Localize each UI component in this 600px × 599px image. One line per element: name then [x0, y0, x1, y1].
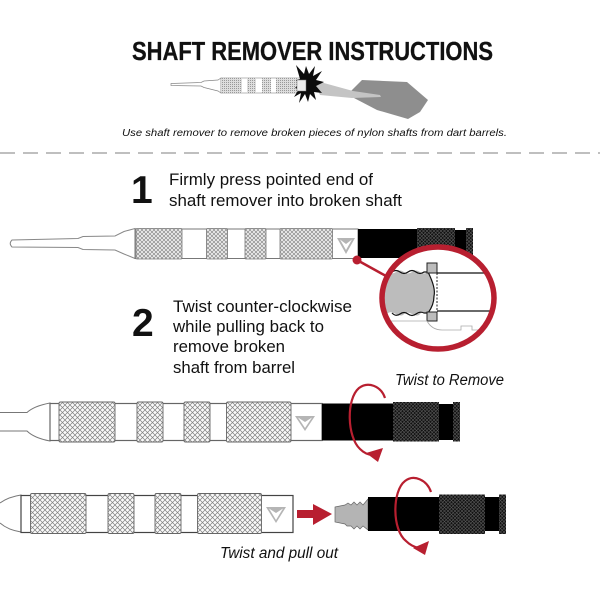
thread lines	[392, 270, 434, 316]
end knurl	[499, 494, 506, 534]
dark knurl	[393, 402, 439, 442]
dart 2	[0, 385, 460, 462]
dart barrel	[221, 78, 305, 93]
step 1 text: Firmly press pointed end of	[169, 170, 373, 189]
dart 1	[10, 228, 473, 260]
outline of shaft	[391, 320, 478, 330]
title: SHAFT REMOVER INSTRUCTIONS	[132, 36, 493, 66]
barrel	[50, 404, 322, 440]
bore lines	[437, 273, 490, 311]
step 2 text: while pulling back to	[172, 317, 324, 336]
dart shaft	[313, 80, 381, 98]
step 1 number: 1	[131, 169, 153, 212]
black section	[455, 230, 467, 258]
magnified detail callout	[352, 247, 494, 349]
subtitle: Use shaft remover to remove broken pieces of nylon shafts from dart barrels.	[122, 128, 507, 139]
logo	[337, 238, 355, 254]
step 2 number: 2	[132, 302, 154, 345]
knurled grips	[136, 228, 332, 259]
end knurl	[466, 228, 473, 260]
barrel flange	[427, 263, 437, 321]
twist to remove label: Twist to Remove	[395, 372, 504, 389]
removed shaft assembly	[335, 478, 506, 555]
threaded broken piece	[335, 499, 368, 530]
lens content	[378, 263, 490, 330]
dark knurl	[439, 494, 485, 534]
dart tip	[171, 78, 221, 93]
step 2 text: shaft from barrel	[173, 358, 295, 377]
twist arrow	[395, 478, 431, 555]
tip	[0, 495, 21, 532]
tip	[0, 403, 50, 441]
logo	[295, 416, 315, 431]
leader line	[357, 260, 386, 276]
impact star	[294, 65, 324, 103]
barrel	[135, 229, 358, 258]
leader dot	[352, 256, 362, 264]
step 2 text: Twist counter-clockwise	[173, 297, 352, 316]
barrel	[21, 496, 293, 532]
logo	[266, 507, 286, 523]
twist and pull out label: Twist and pull out	[220, 545, 339, 562]
lens background	[382, 247, 494, 349]
step 1 text: shaft remover into broken shaft	[169, 191, 402, 210]
lens ring	[382, 247, 494, 349]
dashed divider	[0, 152, 600, 154]
black shaft section	[322, 404, 393, 440]
black shaft section	[368, 497, 439, 531]
twist arrow	[350, 385, 385, 462]
knurled grips	[59, 402, 291, 442]
dart flight	[350, 80, 428, 119]
broken dart illustration	[171, 65, 428, 119]
knurled grips	[30, 494, 262, 534]
tip	[10, 228, 135, 258]
black shaft section	[358, 229, 418, 258]
shaft stub	[297, 80, 306, 91]
black section	[439, 404, 453, 440]
broken shaft piece	[384, 270, 434, 316]
step 2 text: remove broken	[173, 337, 285, 356]
dark knurl	[417, 228, 455, 260]
end knurl	[453, 402, 460, 442]
dotted edge	[436, 274, 438, 310]
dart 3	[0, 494, 293, 534]
pull arrow	[297, 504, 332, 525]
black section	[485, 497, 499, 531]
